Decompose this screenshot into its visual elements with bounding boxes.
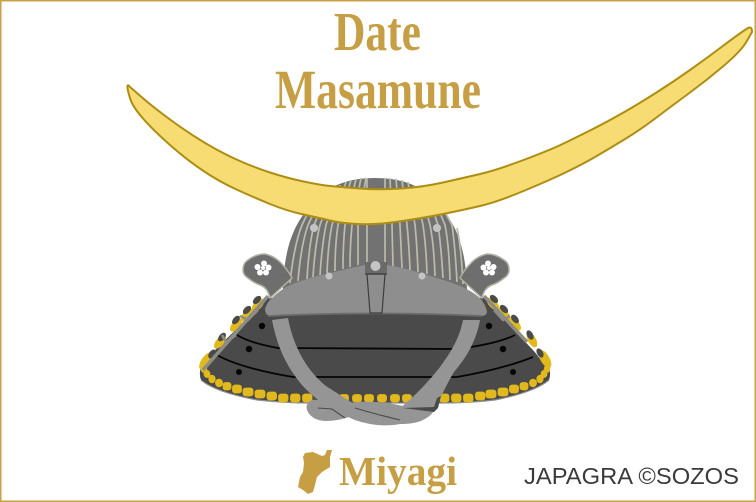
- helmet: [197, 178, 554, 425]
- icon: Miyagi prefecture map: [298, 450, 332, 494]
- helmet skirt (shikoro): [200, 298, 550, 403]
- crescent maedate: [127, 28, 752, 224]
- visor (mabizashi): [265, 265, 487, 316]
- center crest holder: [365, 261, 387, 313]
- right side ear (fukikaeshi) with crest: [460, 254, 509, 298]
- right chin cord: [400, 320, 480, 408]
- left side ear (fukikaeshi) with crest: [243, 254, 292, 298]
- left lacing on skirt edge: [197, 294, 268, 372]
- cord knot: [307, 396, 441, 425]
- credit text: JAPAGRA ©SOZOS: [524, 463, 739, 489]
- helmet bowl with ribs: [283, 178, 467, 290]
- yellow lacing dots along skirt hem: [201, 365, 550, 402]
- right lacing on skirt edge: [484, 293, 554, 370]
- left chin cord: [272, 318, 354, 418]
- title: Masamune: Masamune: [275, 59, 481, 120]
- label: Miyagi: Miyagi: [339, 448, 457, 494]
- title: Date: Date: [334, 1, 421, 62]
